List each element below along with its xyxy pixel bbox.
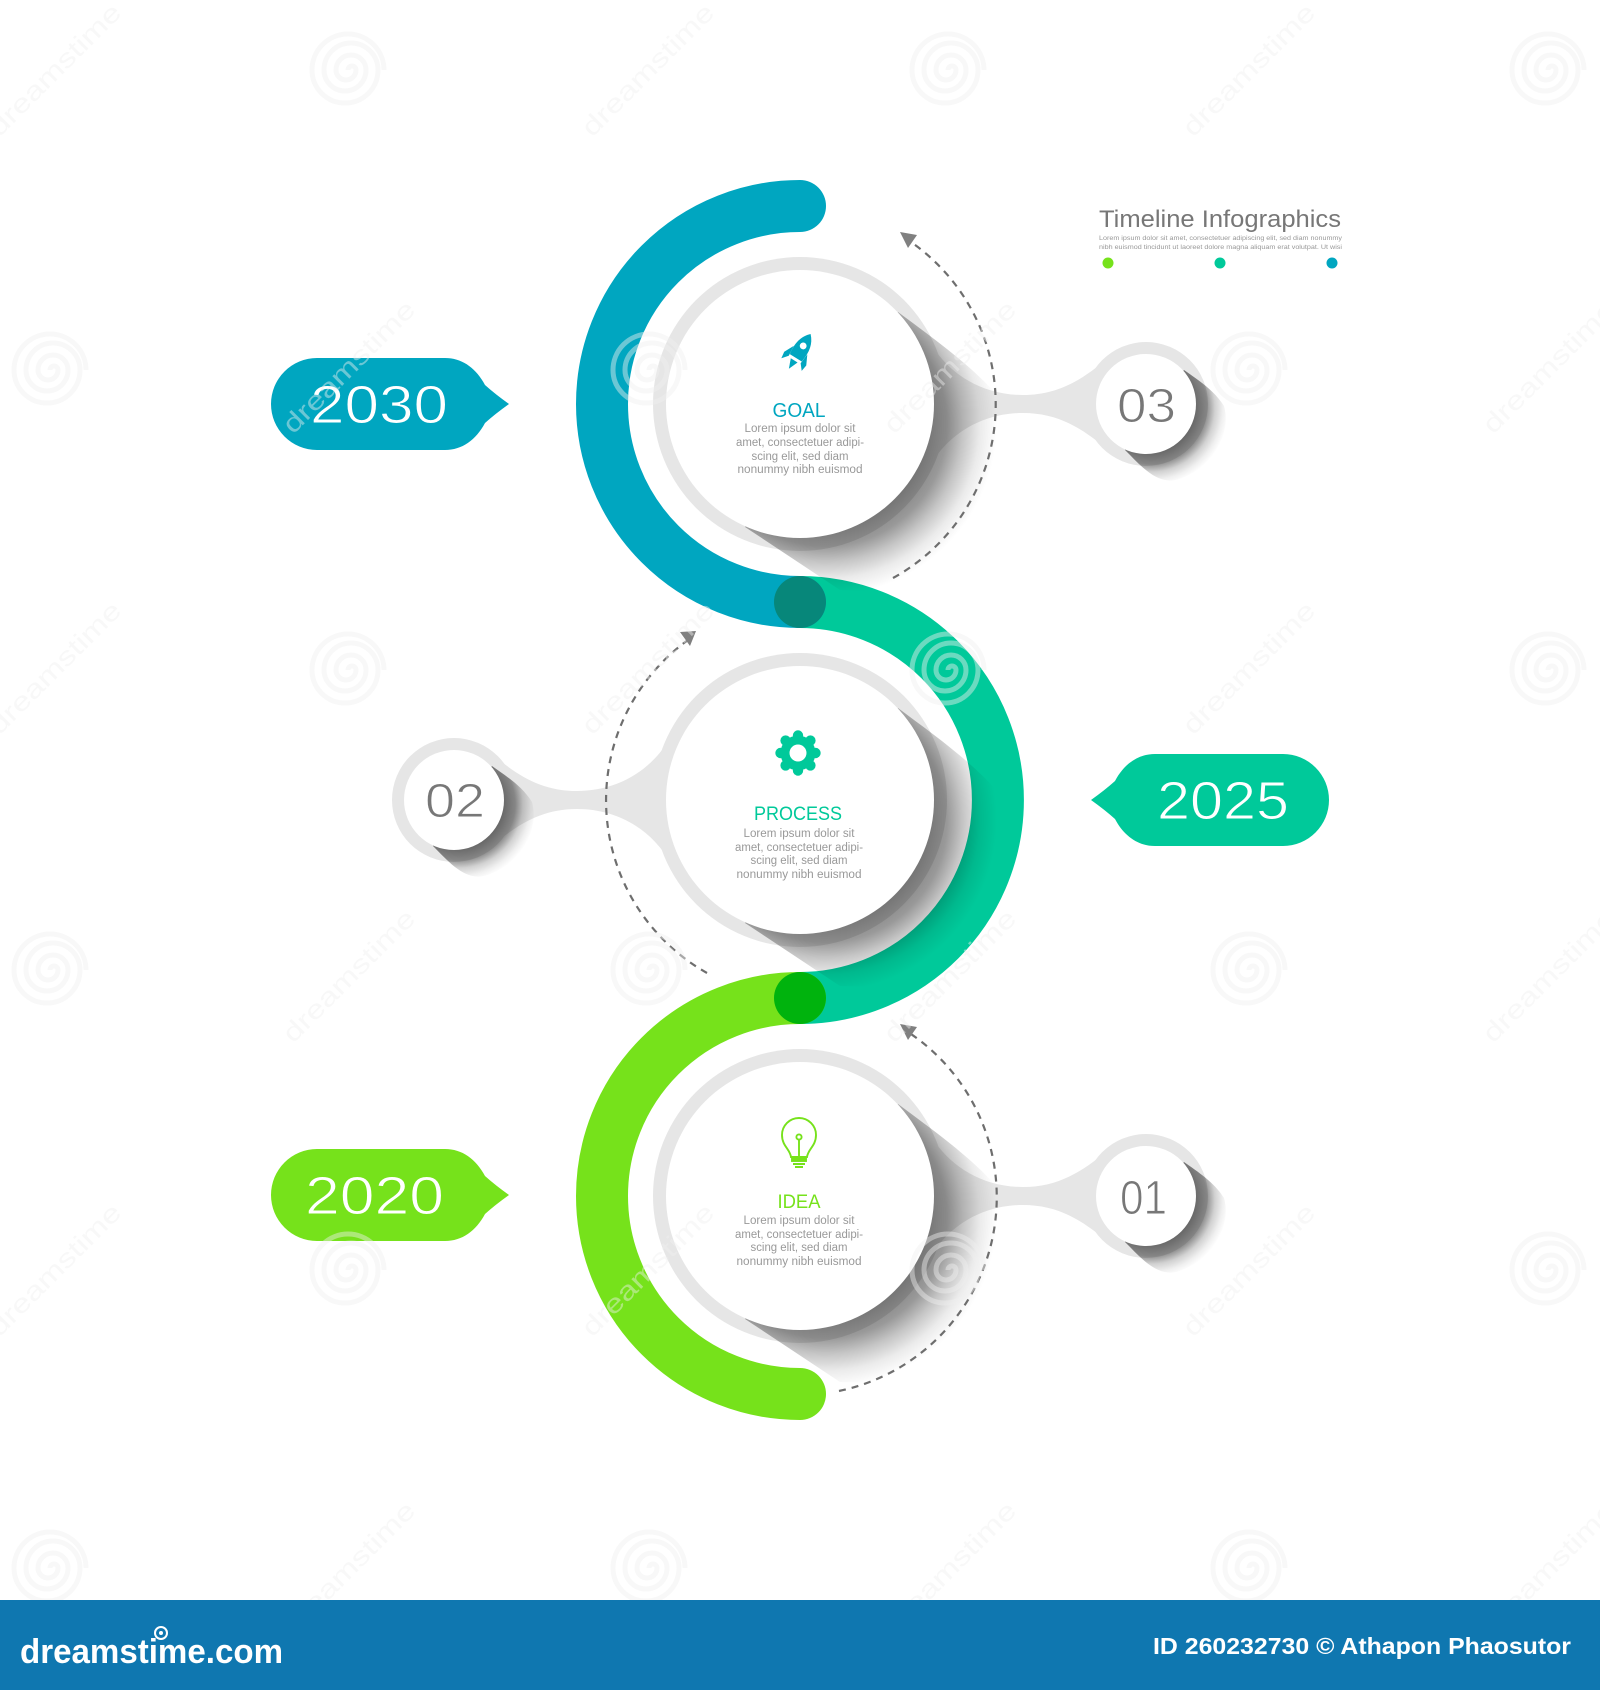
watermark pattern: dreamstime [575, 0, 720, 142]
watermark pattern: dreamstime [575, 1197, 720, 1342]
watermark pattern: dreamstime [1476, 294, 1600, 439]
text: idea: nonummy nibh euismod [736, 1256, 862, 1268]
text: goal [736, 400, 864, 476]
footer bar: ID 260232730 © Athapon Phaosutor [1153, 1633, 1571, 1659]
step number 02: 02 [425, 775, 485, 828]
watermark pattern: dreamstime [276, 903, 421, 1048]
ribbon joint: teal and green overlap [774, 972, 826, 1024]
ribbon joint: blue and teal overlap [774, 576, 826, 628]
text: process [735, 804, 863, 881]
watermark pattern: dreamstime [1176, 595, 1321, 740]
dashed arrow: idea [839, 1024, 997, 1391]
text: goal: GOAL [772, 400, 826, 422]
footer bar: dreamstime.com [20, 1633, 283, 1671]
panel: goal circle [653, 257, 1226, 594]
text: process: nonummy nibh euismod [736, 869, 862, 881]
watermark pattern: dreamstime [1176, 0, 1321, 142]
watermark pattern: dreamstime [1476, 903, 1600, 1048]
watermark pattern: dreamstime [877, 294, 1022, 439]
long shadow of number badge [1125, 1162, 1226, 1273]
text: process: Lorem ipsum dolor sit [744, 828, 855, 840]
text: idea [735, 1192, 863, 1268]
year tag: 2025: 2025 [1157, 771, 1289, 831]
watermark pattern: dreamstime [575, 595, 720, 740]
year tag: 2020: 2020 [305, 1166, 444, 1226]
title block: nibh euismod tincidunt ut laoreet dolore magna aliquam erat volutpat. Ut wisi [1099, 244, 1342, 251]
text: process: scing elit, sed diam [750, 855, 848, 867]
title block: Lorem ipsum dolor sit amet, consectetuer adipiscing elit, sed diam nonummy [1099, 235, 1343, 242]
footer bar [0, 1600, 1600, 1690]
white number badge [404, 750, 504, 850]
white number badge [1096, 1146, 1196, 1246]
step number 01: 01 [1120, 1172, 1167, 1225]
text: idea: IDEA [778, 1192, 821, 1213]
year tag: 2030: 2030 [310, 375, 448, 435]
ribbon segment: green 2020 [602, 998, 800, 1394]
text: idea: amet, consectetuer adipi- [735, 1229, 863, 1241]
connector ring and badge backing [653, 1049, 1208, 1343]
year tag: 2030 [271, 358, 509, 450]
watermark pattern: dreamstime [877, 1495, 1022, 1640]
watermark pattern: dreamstime [276, 1495, 421, 1640]
step number 03: 03 [1117, 380, 1176, 433]
long shadow of number badge [433, 766, 534, 877]
year tag: 2025 [1091, 754, 1329, 846]
text: goal: Lorem ipsum dolor sit [744, 423, 856, 435]
text: goal: nonummy nibh euismod [738, 464, 862, 476]
icon: light bulb [782, 1118, 816, 1167]
ribbon segment: teal 2025 [800, 602, 998, 998]
watermark pattern: dreamstime [276, 294, 421, 439]
watermark pattern: dreamstime [1176, 1197, 1321, 1342]
panel: process circle [392, 653, 1035, 990]
long shadow of main circle [745, 312, 1035, 594]
text: goal: scing elit, sed diam [752, 451, 848, 463]
title block [1099, 206, 1343, 268]
ribbon segment: blue 2030 [602, 206, 800, 602]
dashed arrow: process [606, 631, 707, 973]
year tag: 2020 [271, 1149, 509, 1241]
panel: idea circle [653, 1049, 1226, 1386]
connector ring and badge backing [392, 653, 947, 947]
white number badge [1096, 354, 1196, 454]
icon: rocket [778, 327, 822, 376]
long shadow of main circle [745, 1104, 1035, 1386]
watermark pattern: dreamstime [877, 903, 1022, 1048]
dashed arrow: goal [893, 232, 996, 578]
long shadow of number badge [1125, 370, 1226, 481]
watermark pattern: dreamstime [1476, 1495, 1600, 1640]
winding timeline ribbon [602, 206, 998, 1394]
text: goal: amet, consectetuer adipi- [736, 437, 864, 449]
white main circle [666, 1062, 934, 1330]
text: idea: scing elit, sed diam [750, 1242, 848, 1254]
title block: Timeline Infographics [1099, 206, 1341, 233]
icon: gear [775, 730, 821, 776]
connector ring and badge backing [653, 257, 1208, 551]
white main circle [666, 270, 934, 538]
text: process: amet, consectetuer adipi- [735, 842, 863, 854]
white main circle [666, 666, 934, 934]
text: idea: Lorem ipsum dolor sit [744, 1215, 855, 1227]
long shadow of main circle [745, 708, 1035, 990]
text: process: PROCESS [754, 804, 842, 825]
